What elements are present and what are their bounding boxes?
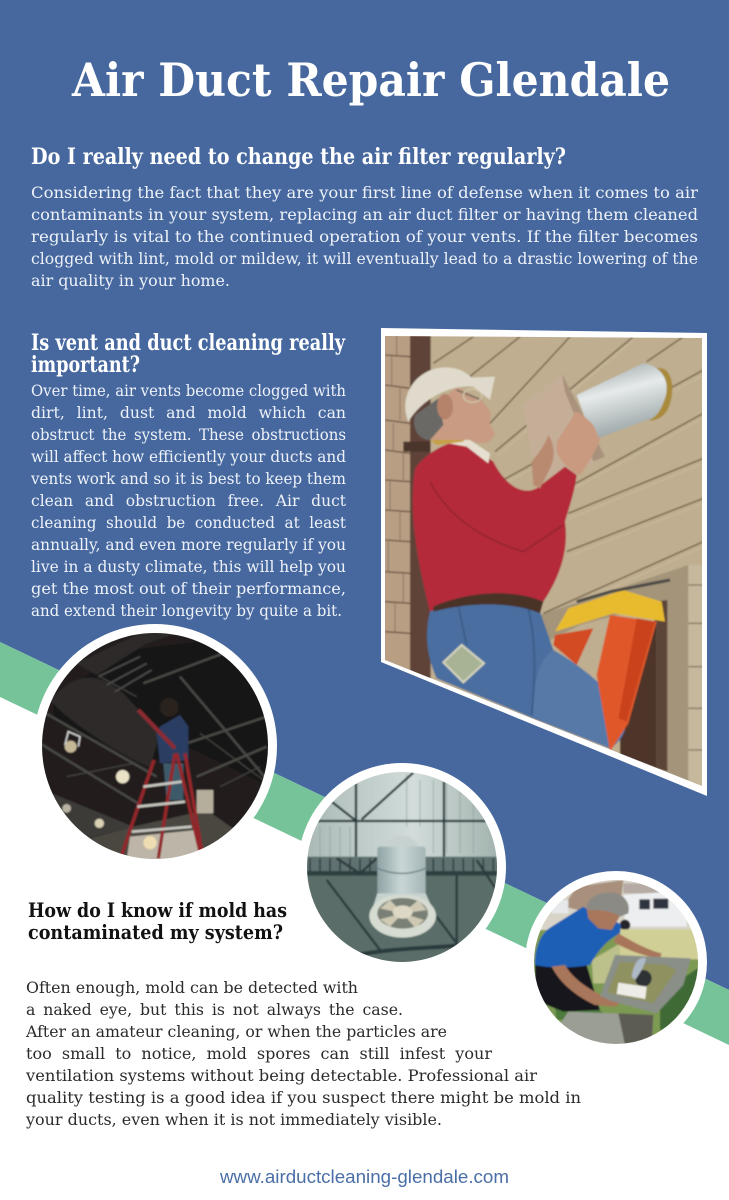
- ladder: [597, 615, 657, 752]
- text block: mold answer: your ducts, even when it is not immediately visible.: [25, 1110, 442, 1129]
- website url: www.airductcleaning-glendale.com: [219, 1167, 509, 1187]
- text block: vent cleaning answer: clean and obstruction free. Air duct: [31, 491, 347, 510]
- pants: [535, 963, 600, 1012]
- text block: vent cleaning answer: live in a dusty climate, this will help you: [31, 557, 346, 576]
- text block: mold answer: After an amateur cleaning, or when the particles are: [25, 1022, 447, 1041]
- worker: [157, 715, 188, 763]
- text block: mold answer: Often enough, mold can be detected with: [26, 978, 358, 997]
- unit lid: [600, 955, 691, 1013]
- ladder: [122, 753, 202, 858]
- text block: vent cleaning answer: get the most out of their performance,: [31, 579, 346, 598]
- photo circle: ceiling-mounted duct fan: [298, 763, 506, 971]
- arms: [552, 965, 620, 1007]
- text block: mold answer: a naked eye, but this is not always the case.: [26, 1000, 403, 1019]
- text block: air filter answer: regularly is vital to the continued operation of your vents. If the filter becomes: [31, 227, 698, 246]
- hands: [557, 412, 600, 475]
- heading: mold question: How do I know if mold has: [28, 898, 287, 922]
- photo: technician installing vent on house siding: [380, 325, 715, 800]
- fan housing: [405, 837, 417, 846]
- collar: [449, 439, 490, 464]
- unit base: [560, 1010, 626, 1044]
- photo circle: worker on red ladder in dark ceiling: [33, 624, 277, 868]
- heading: mold question: [28, 898, 287, 944]
- tape measure: [443, 645, 484, 682]
- text block: vent cleaning answer: cleaning should be conducted at least: [31, 513, 347, 532]
- text block: air filter answer: Considering the fact that they are your first line of defense when it comes to air: [31, 183, 698, 202]
- heading: air filter question: Do I really need to change the air filter regularly?: [31, 144, 566, 170]
- text block: vent cleaning answer: annually, and even more regularly if you: [31, 535, 346, 554]
- heading: vent cleaning question: important?: [31, 352, 140, 378]
- jeans: [426, 603, 606, 746]
- text block: vent cleaning answer: and extend their longevity by quite a bit.: [31, 601, 342, 620]
- belt: [433, 593, 543, 613]
- text block: air filter answer: contaminants in your system, replacing an air duct filter or having them cleaned: [31, 205, 698, 224]
- heading: vent cleaning question: [31, 330, 346, 378]
- text block: mold answer: too small to notice, mold spores can still infest your: [26, 1044, 492, 1063]
- photo circle: technician servicing outdoor unit: [525, 871, 707, 1053]
- text block: vent cleaning answer: vents work and so it is best to keep them: [30, 469, 346, 488]
- text block: air filter answer: air quality in your home.: [31, 271, 230, 290]
- text block: mold answer: quality testing is a good idea if you suspect there might be mold in: [26, 1088, 581, 1107]
- title: Air Duct Repair Glendale: [71, 53, 670, 107]
- text block: vent cleaning answer: obstruct the system. These obstructions: [31, 425, 346, 444]
- lights: [65, 741, 77, 753]
- text block: mold answer: [25, 978, 581, 1129]
- text block: vent cleaning answer: [30, 381, 347, 620]
- text block: vent cleaning answer: Over time, air vents become clogged with: [31, 381, 346, 400]
- heading: mold question: contaminated my system?: [28, 920, 283, 944]
- duct pipe and hood: [577, 363, 667, 440]
- shirt: [535, 907, 621, 967]
- cap: [405, 367, 495, 422]
- red sweater: [413, 441, 577, 612]
- text block: vent cleaning answer: dirt, lint, dust and mold which can: [31, 403, 346, 422]
- text block: mold answer: ventilation systems without being detectable. Professional air: [25, 1066, 537, 1085]
- green diagonal band: [0, 642, 729, 1045]
- head: [587, 908, 622, 930]
- text block: air filter answer: clogged with lint, mold or mildew, it will eventually lead to a drastic lowering of the: [31, 249, 698, 268]
- head: [430, 387, 495, 443]
- text block: vent cleaning answer: will affect how efficiently your ducts and: [31, 447, 346, 466]
- text block: air filter answer: [31, 183, 698, 290]
- heading: vent cleaning question: Is vent and duct cleaning really: [31, 330, 346, 356]
